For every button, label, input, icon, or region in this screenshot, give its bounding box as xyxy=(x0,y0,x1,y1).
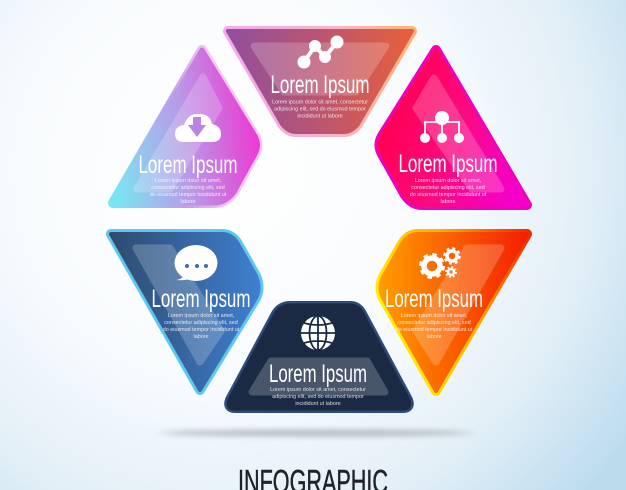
text block: upper left panel: Lorem ipsum dolor sit amet, xyxy=(155,178,222,184)
panel: top, line chart xyxy=(228,31,412,132)
text block: upper left panel xyxy=(150,178,227,205)
text block: upper right panel: consectetur adipiscing elit, sed xyxy=(411,185,485,191)
panel: upper right, hierarchy xyxy=(380,50,527,205)
icon: hierarchy xyxy=(420,111,464,143)
panel: lower left, speech bubble xyxy=(111,234,258,390)
text block: bottom panel: Lorem ipsum dolor sit amet, consectetur xyxy=(270,387,366,393)
icon: cloud download xyxy=(175,114,221,142)
heading: bottom panel: Lorem Ipsum xyxy=(269,360,367,388)
text block: lower left panel: labore xyxy=(194,334,208,340)
heading: upper right panel: Lorem Ipsum xyxy=(398,150,498,178)
panel: upper left, cloud download xyxy=(113,50,258,205)
icon: speech bubble xyxy=(174,245,218,281)
text block: lower left panel xyxy=(163,313,240,340)
text block: bottom panel xyxy=(270,387,366,407)
text block: upper right panel: labore xyxy=(440,199,456,205)
text block: lower left panel: Lorem ipsum dolor sit amet, xyxy=(168,313,235,319)
text block: lower left panel: do eiusmod tempor incididunt ut xyxy=(163,327,240,333)
text block: upper right panel xyxy=(410,178,487,205)
heading: top panel: Lorem Ipsum xyxy=(270,71,370,99)
shadow under diagram xyxy=(161,430,471,436)
text block: lower right panel: Lorem ipsum dolor sit amet, xyxy=(401,313,468,319)
text block: lower right panel: labore xyxy=(426,334,442,340)
text block: upper left panel: labore xyxy=(180,199,196,205)
text block: lower right panel: consectetur adipiscing elit, sed xyxy=(397,320,471,326)
text block: lower right panel xyxy=(396,313,473,340)
text block: upper right panel: do eiusmod tempor incididunt ut xyxy=(410,192,487,198)
text block: upper left panel: consectetur adipiscing elit, sed xyxy=(151,185,225,191)
text block: lower left panel: consectetur adipiscing elit, sed xyxy=(164,320,238,326)
icon: globe xyxy=(301,316,335,350)
text block: lower right panel: do eiusmod tempor incididunt ut xyxy=(396,327,473,333)
text block: bottom panel: incididunt ut labore xyxy=(295,401,341,407)
text block: top panel: Lorem ipsum dolor sit amet, consectetur xyxy=(272,100,368,106)
icon: gears xyxy=(420,248,460,278)
text block: bottom panel: adipiscing elit, sed do eiusmod tempor xyxy=(272,394,364,400)
text block: top panel: incididunt ut labore xyxy=(297,114,343,120)
panel: bottom, globe xyxy=(229,306,409,408)
text block: upper left panel: do eiusmod tempor incididunt ut xyxy=(150,192,227,198)
icon: connected nodes xyxy=(298,36,343,68)
panel: lower right, gears xyxy=(380,234,527,391)
text block: upper right panel: Lorem ipsum dolor sit amet, xyxy=(415,178,482,184)
text block: top panel xyxy=(272,100,368,120)
heading: lower right panel: Lorem Ipsum xyxy=(385,285,483,313)
heading: lower left panel: Lorem Ipsum xyxy=(152,285,250,313)
heading: upper left panel: Lorem Ipsum xyxy=(138,151,238,179)
text block: top panel: adipiscing elit, sed do eiusmod tempor xyxy=(274,106,366,112)
